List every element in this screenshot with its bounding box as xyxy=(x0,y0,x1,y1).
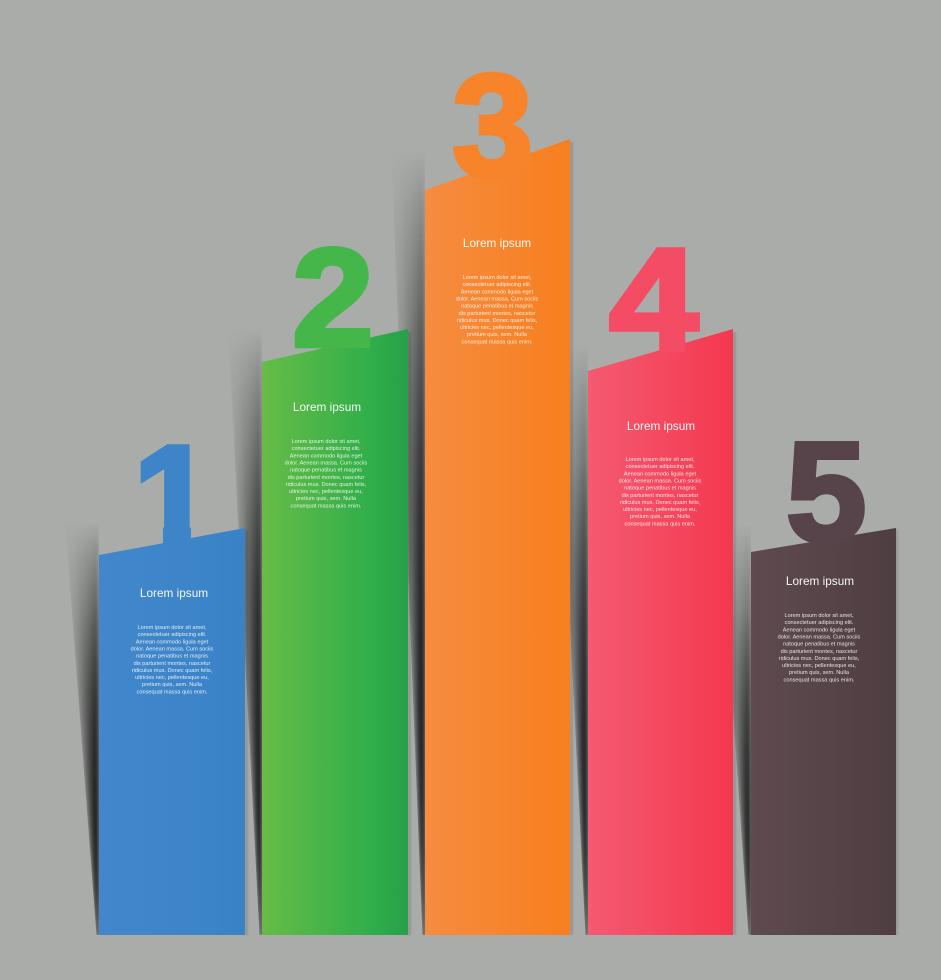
body text 3: dolor. Aenean massa. Cum sociis xyxy=(456,296,539,302)
heading 2: Lorem ipsum xyxy=(293,400,361,414)
shadow: bar 5 xyxy=(733,539,751,935)
body text 2: dis parturient montes, nascetur xyxy=(288,475,365,481)
heading 5: Lorem ipsum xyxy=(786,574,854,588)
body text 4: dolor. Aenean massa. Cum sociis xyxy=(619,478,702,484)
body text 1: consectetuer adipiscing elit. xyxy=(138,632,207,638)
body text 1: pretium quis, sem. Nulla xyxy=(142,682,203,688)
body text 3: dis parturient montes, nascetur xyxy=(459,311,536,317)
panel: step 2 green column xyxy=(262,220,408,935)
panel: step 3 orange column xyxy=(425,44,570,935)
body text 1: Lorem ipsum dolor sit amet, xyxy=(137,625,207,631)
body text 1: ridiculus mus. Donec quam felis, xyxy=(132,668,213,674)
column shape 3 xyxy=(425,139,570,935)
body text 5: ultricies nec, pellentesque eu, xyxy=(782,663,856,669)
body text 3: ridiculus mus. Donec quam felis, xyxy=(457,318,538,324)
body text 5: Lorem ipsum dolor sit amet, xyxy=(784,613,854,619)
body text 2: Lorem ipsum dolor sit amet, xyxy=(291,439,361,445)
body text 1: dolor. Aenean massa. Cum sociis xyxy=(131,646,214,652)
body text 4: natoque penatibus et magnis xyxy=(624,486,696,492)
body text 3: pretium quis, sem. Nulla xyxy=(467,332,528,338)
body text 1: consequat massa quis enim. xyxy=(137,689,208,695)
body text 4: dis parturient montes, nascetur xyxy=(622,493,699,499)
shadow: bar 1 xyxy=(70,531,99,935)
body text 1: ultricies nec, pellentesque eu, xyxy=(135,675,209,681)
body text 2: consectetuer adipiscing elit. xyxy=(292,446,361,452)
body text 4: consequat massa quis enim. xyxy=(625,521,696,527)
shadow: bar 3 xyxy=(396,168,425,935)
body text 4: ridiculus mus. Donec quam felis, xyxy=(620,500,701,506)
body text 4: pretium quis, sem. Nulla xyxy=(630,514,691,520)
body text 1: Aenean commodo ligula eget xyxy=(136,639,209,645)
body text 2: ultricies nec, pellentesque eu, xyxy=(289,489,363,495)
shadow: bar 2 xyxy=(233,342,262,935)
body text 2: dolor. Aenean massa. Cum sociis xyxy=(285,460,368,466)
body text 4: consectetuer adipiscing elit. xyxy=(626,464,695,470)
body text 5: natoque penatibus et magnis xyxy=(783,642,855,648)
body text 2: natoque penatibus et magnis xyxy=(290,468,362,474)
heading 1: Lorem ipsum xyxy=(140,586,208,600)
body text 3: consectetuer adipiscing elit. xyxy=(463,282,532,288)
panel: step 4 red column xyxy=(588,218,733,935)
heading 4: Lorem ipsum xyxy=(627,419,695,433)
body text 2: consequat massa quis enim. xyxy=(291,503,362,509)
panel: step 1 blue column xyxy=(99,417,245,935)
body text 4: ultricies nec, pellentesque eu, xyxy=(623,507,697,513)
body text 5: pretium quis, sem. Nulla xyxy=(789,670,850,676)
body text 3: ultricies nec, pellentesque eu, xyxy=(460,325,534,331)
body text 5: consectetuer adipiscing elit. xyxy=(785,620,854,626)
number 3: 3 xyxy=(452,44,533,207)
number 5: 5 xyxy=(786,413,867,572)
right edge fringes of the columns xyxy=(245,142,898,935)
column shape 2 xyxy=(262,329,408,935)
column shape 5 xyxy=(751,528,896,935)
body text 5: Aenean commodo ligula eget xyxy=(783,627,856,633)
heading 3: Lorem ipsum xyxy=(463,236,531,250)
body text 5: ridiculus mus. Donec quam felis, xyxy=(779,656,860,662)
column shape 1 xyxy=(99,528,245,935)
body text 2: pretium quis, sem. Nulla xyxy=(296,496,357,502)
column shape 4 xyxy=(588,329,733,935)
body text 5: consequat massa quis enim. xyxy=(784,677,855,683)
body text 3: natoque penatibus et magnis xyxy=(461,304,533,310)
body text 1: natoque penatibus et magnis xyxy=(136,654,208,660)
body text 5: dis parturient montes, nascetur xyxy=(781,649,858,655)
body text 4: Lorem ipsum dolor sit amet, xyxy=(625,457,695,463)
body text 5: dolor. Aenean massa. Cum sociis xyxy=(778,634,861,640)
body text 3: Lorem ipsum dolor sit amet, xyxy=(462,275,532,281)
body text 4: Aenean commodo ligula eget xyxy=(624,471,697,477)
number 2: 2 xyxy=(292,220,374,376)
shadow: bar 4 xyxy=(570,363,588,935)
body text 2: Aenean commodo ligula eget xyxy=(290,453,363,459)
body text 2: ridiculus mus. Donec quam felis, xyxy=(286,482,367,488)
number 4: 4 xyxy=(609,218,698,381)
number 1: 1 xyxy=(134,417,213,576)
body text 1: dis parturient montes, nascetur xyxy=(134,661,211,667)
body text 3: consequat massa quis enim. xyxy=(462,339,533,345)
panel: step 5 brown column xyxy=(751,413,896,935)
body text 3: Aenean commodo ligula eget xyxy=(461,289,534,295)
